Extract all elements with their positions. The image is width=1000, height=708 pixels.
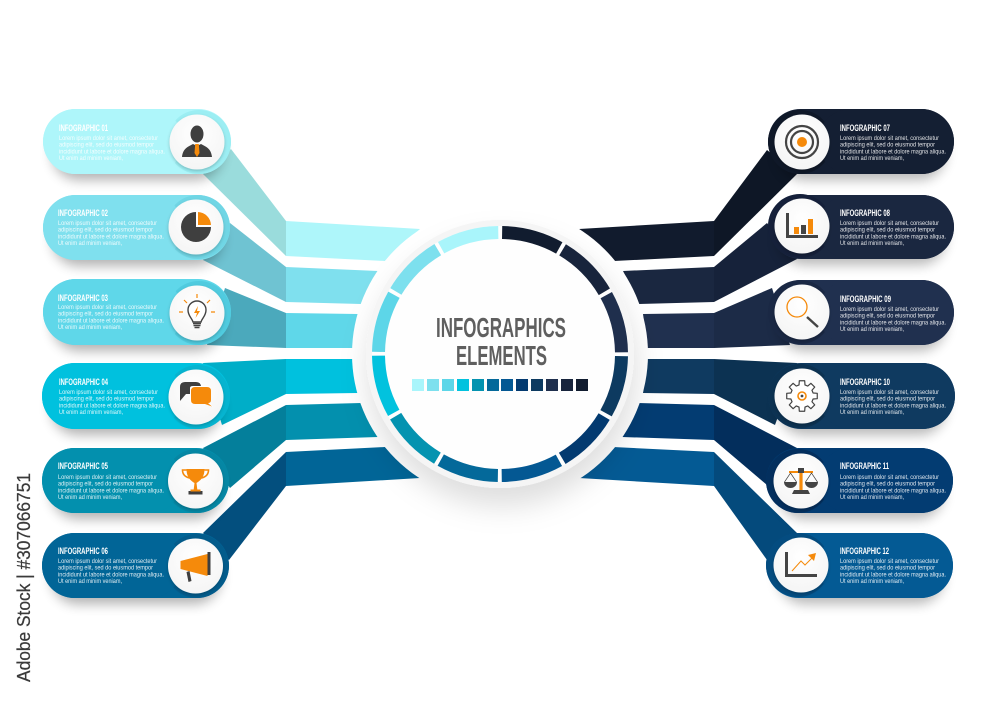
- panel: infographic 06: [42, 533, 229, 604]
- icon: gear: [787, 381, 817, 411]
- panel: infographic 04: INFOGRAPHIC 04: [59, 377, 108, 387]
- panel: infographic 08: Ut enim ad minim veniam,: [840, 241, 904, 247]
- panel: infographic 05: INFOGRAPHIC 05: [58, 461, 108, 471]
- panel: infographic 08: INFOGRAPHIC 08: [840, 208, 890, 218]
- panel: infographic 12: incididunt ut labore et dolore magna aliqua.: [840, 572, 946, 578]
- icon: growth chart: [785, 552, 817, 577]
- panel: infographic 03: adipiscing elit, sed do eiusmod tempor: [58, 312, 153, 318]
- panel: infographic 07: incididunt ut labore et dolore magna aliqua.: [840, 149, 946, 155]
- panel: infographic 09: incididunt ut labore et dolore magna aliqua.: [840, 320, 946, 326]
- ribbon 07: [579, 150, 797, 261]
- icon: chat bubbles: [180, 382, 213, 407]
- icon: bar chart: [786, 213, 818, 238]
- watermark: stock id: Adobe Stock | #307066751: [13, 473, 34, 682]
- panel: infographic 01: INFOGRAPHIC 01: [59, 123, 108, 133]
- panel: infographic 04: incididunt ut labore et dolore magna aliqua.: [59, 403, 165, 409]
- panel: infographic 10: [768, 363, 955, 435]
- disc face: [372, 226, 628, 482]
- ribbon 11: [622, 403, 797, 485]
- panel: infographic 11: adipiscing elit, sed do eiusmod tempor: [840, 482, 935, 488]
- panel: infographic 06: incididunt ut labore et dolore magna aliqua.: [58, 572, 164, 578]
- panel: infographic 05: [42, 448, 229, 519]
- panel: infographic 12: Lorem ipsum dolor sit amet, consectetur: [840, 559, 939, 565]
- panel: infographic 08: [768, 194, 954, 265]
- panel: infographic 12: INFOGRAPHIC 12: [840, 546, 889, 556]
- icon: businessman: [182, 126, 212, 157]
- panel: infographic 02: Ut enim ad minim veniam,: [58, 241, 122, 247]
- icon: scales: [784, 468, 818, 494]
- ribbons: left side: [203, 149, 420, 560]
- panel: infographic 06: Ut enim ad minim veniam,: [58, 579, 122, 585]
- panel: infographic 07: adipiscing elit, sed do eiusmod tempor: [840, 143, 935, 149]
- panel: infographic 01: adipiscing elit, sed do eiusmod tempor: [59, 143, 154, 149]
- title: [436, 312, 566, 371]
- panel: infographic 01: Lorem ipsum dolor sit amet, consectetur: [59, 136, 158, 142]
- panel: infographic 01: [43, 109, 231, 180]
- panel: infographic 10: incididunt ut labore et dolore magna aliqua.: [840, 403, 946, 409]
- panel: infographic 02: [43, 195, 230, 266]
- icon: magnifier: [787, 297, 818, 327]
- panel: infographic 03: [43, 279, 231, 351]
- panel: infographic 06: adipiscing elit, sed do eiusmod tempor: [58, 566, 153, 572]
- panel: infographic 03: incididunt ut labore et dolore magna aliqua.: [58, 318, 164, 324]
- panel: infographic 08: adipiscing elit, sed do eiusmod tempor: [840, 228, 935, 234]
- colour swatches: [412, 379, 588, 391]
- panel: infographic 07: [768, 109, 954, 180]
- ribbon 05: [203, 403, 378, 488]
- panel: infographic 04: [42, 363, 230, 435]
- panel: infographic 09: adipiscing elit, sed do eiusmod tempor: [840, 314, 935, 320]
- panel: infographic 11: Ut enim ad minim veniam,: [840, 495, 904, 501]
- panel: infographic 11: INFOGRAPHIC 11: [840, 461, 889, 471]
- panel: infographic 05: Lorem ipsum dolor sit amet, consectetur: [58, 475, 157, 481]
- panel: infographic 08: incididunt ut labore et dolore magna aliqua.: [840, 234, 946, 240]
- title: ELEMENTS: [456, 340, 547, 371]
- ribbon 01: [203, 149, 420, 261]
- ribbon 06: [203, 447, 420, 560]
- panel: infographic 11: incididunt ut labore et dolore magna aliqua.: [840, 488, 946, 494]
- panel: infographic 12: adipiscing elit, sed do eiusmod tempor: [840, 566, 935, 572]
- segmented ring: [333, 187, 667, 521]
- panel: infographic 11: Lorem ipsum dolor sit amet, consectetur: [840, 475, 939, 481]
- panel: infographic 04: adipiscing elit, sed do eiusmod tempor: [59, 397, 154, 403]
- panel: infographic 05: incididunt ut labore et dolore magna aliqua.: [58, 488, 164, 494]
- ribbon 10: [643, 359, 797, 425]
- panel: infographic 06: INFOGRAPHIC 06: [58, 546, 108, 556]
- panel: infographic 03: Ut enim ad minim veniam,: [58, 325, 122, 331]
- panel: infographic 07: Lorem ipsum dolor sit amet, consectetur: [840, 136, 939, 142]
- ribbon 03: [207, 288, 358, 348]
- icon: light bulb: [179, 294, 215, 328]
- icon: pie chart: [181, 212, 211, 242]
- panel: infographic 05: Ut enim ad minim veniam,: [58, 495, 122, 501]
- panel: infographic 03: Lorem ipsum dolor sit amet, consectetur: [58, 305, 157, 311]
- icon: megaphone: [180, 552, 210, 582]
- ribbons: right side: [579, 150, 797, 560]
- panel: infographic 10: adipiscing elit, sed do eiusmod tempor: [840, 397, 935, 403]
- panel: infographic 09: Lorem ipsum dolor sit amet, consectetur: [840, 307, 939, 313]
- panel: infographic 02: INFOGRAPHIC 02: [58, 208, 108, 218]
- disc clearing: [352, 206, 648, 502]
- panel: infographic 01: incididunt ut labore et dolore magna aliqua.: [59, 149, 165, 155]
- panel: infographic 10: INFOGRAPHIC 10: [840, 377, 890, 387]
- disc body: [366, 220, 634, 488]
- title: INFOGRAPHICS: [436, 312, 566, 343]
- panel: infographic 10: Lorem ipsum dolor sit amet, consectetur: [840, 390, 939, 396]
- panel: infographic 02: Lorem ipsum dolor sit amet, consectetur: [58, 221, 157, 227]
- panel: infographic 01: Ut enim ad minim veniam,: [59, 156, 123, 162]
- ribbon 12: [579, 447, 797, 560]
- ribbon 09: [643, 288, 790, 348]
- panel: infographic 06: Lorem ipsum dolor sit amet, consectetur: [58, 559, 157, 565]
- icon: target: [786, 126, 818, 158]
- panel: infographic 02: incididunt ut labore et dolore magna aliqua.: [58, 234, 164, 240]
- ribbon 04: [203, 359, 358, 425]
- ribbon 02: [203, 223, 378, 304]
- icon: trophy: [182, 469, 208, 494]
- panel: infographic 04: Lorem ipsum dolor sit amet, consectetur: [59, 390, 158, 396]
- panel: infographic 07: Ut enim ad minim veniam,: [840, 156, 904, 162]
- panel: infographic 10: Ut enim ad minim veniam,: [840, 410, 904, 416]
- central disc: [333, 187, 667, 521]
- panel: infographic 03: INFOGRAPHIC 03: [58, 293, 108, 303]
- panel: infographic 08: Lorem ipsum dolor sit amet, consectetur: [840, 221, 939, 227]
- panel: infographic 05: adipiscing elit, sed do eiusmod tempor: [58, 482, 153, 488]
- panel: infographic 11: [766, 448, 953, 519]
- panel: infographic 02: adipiscing elit, sed do eiusmod tempor: [58, 228, 153, 234]
- panel: infographic 09: INFOGRAPHIC 09: [840, 294, 891, 304]
- panel: infographic 12: [766, 533, 953, 604]
- panel: infographic 09: [768, 280, 954, 351]
- panel: infographic 09: Ut enim ad minim veniam,: [840, 327, 904, 333]
- panel: infographic 04: Ut enim ad minim veniam,: [59, 410, 123, 416]
- panel: infographic 12: Ut enim ad minim veniam,: [840, 579, 904, 585]
- panel: infographic 07: INFOGRAPHIC 07: [840, 123, 890, 133]
- ribbon 08: [623, 223, 797, 304]
